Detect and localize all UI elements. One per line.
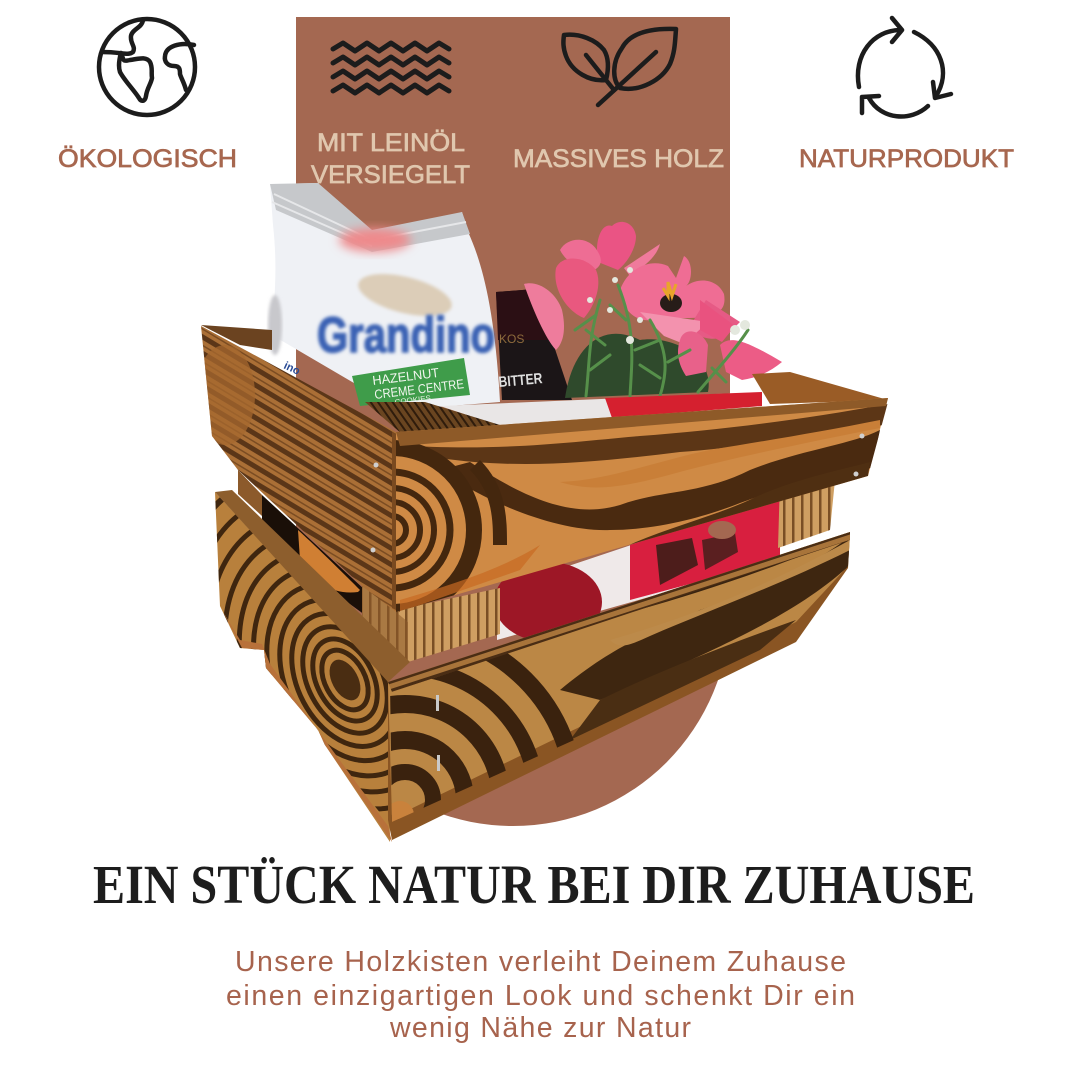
product photo: cookie bag <box>268 183 500 410</box>
product photo: cookie bag: CREME CENTRE <box>374 376 465 402</box>
product photo: cookie bag: HAZELNUT <box>372 365 440 388</box>
product photo: white and red box <box>440 392 762 430</box>
icon: globe <box>99 19 195 115</box>
label: Mit Leinöl versiegelt: VERSIEGELT <box>311 161 470 189</box>
lower left board <box>215 490 410 842</box>
lower front board <box>388 532 850 840</box>
interior seen through crate gap <box>262 495 780 642</box>
upper left board <box>201 326 400 612</box>
product photo: dark chocolate box: KOS <box>499 332 524 346</box>
crate posts <box>238 470 836 662</box>
product photo: cookie bag: Grandino <box>317 307 495 363</box>
icon: waves <box>333 43 449 93</box>
product photo: dark chocolate box: BITTER <box>498 370 543 391</box>
product photo: cookie bag: COOKIES <box>394 394 431 407</box>
icon: recycle arrows <box>858 18 951 116</box>
body text: Unsere Holzkisten verleiht Deinem Zuhause <box>235 946 846 978</box>
label: Naturprodukt: NATURPRODUKT <box>799 145 1014 173</box>
back rim of crate <box>201 325 888 404</box>
product photo: pink flowers <box>524 222 782 398</box>
product photo: cookie bag: ino <box>282 360 302 378</box>
panel: arched brown background <box>296 17 730 826</box>
label: Mit Leinöl versiegelt: MIT LEINÖL <box>317 129 465 157</box>
body text: wenig Nähe zur Natur <box>389 1012 692 1044</box>
label: Massives Holz: MASSIVES HOLZ <box>513 145 724 173</box>
label: Ökologisch: ÖKOLOGISCH <box>58 145 237 173</box>
body text: einen einzigartigen Look und schenkt Dir ein <box>226 980 855 1012</box>
upper front board <box>396 398 888 612</box>
icon: leaves <box>563 29 676 105</box>
title: EIN STÜCK NATUR BEI DIR ZUHAUSE <box>93 854 975 915</box>
product photo: dark chocolate box <box>496 289 572 400</box>
corner end-grain of left board <box>365 402 510 434</box>
